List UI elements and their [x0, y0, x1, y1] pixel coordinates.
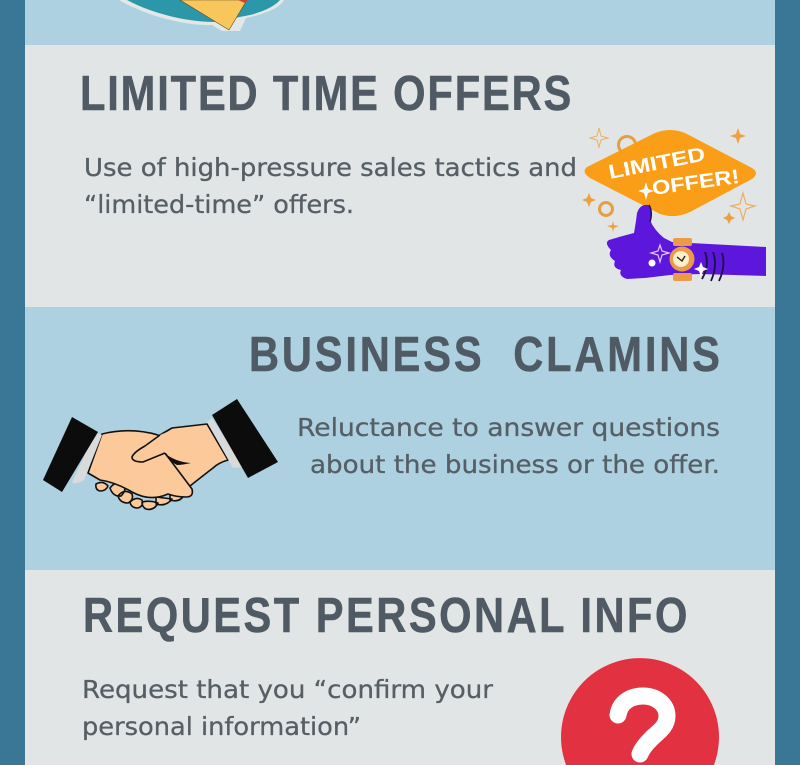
- text block: request description: personal information”: [82, 712, 361, 741]
- heading: limited time offers: LIMITED TIME OFFERS: [80, 66, 571, 121]
- icon: right cuff and sleeve: [207, 399, 278, 478]
- panel: top illustration band: [25, 0, 775, 45]
- icon: red question mark circle: [561, 658, 719, 765]
- icon: wristwatch: [670, 238, 694, 281]
- icon: handshake: [43, 399, 278, 509]
- icon: sparkles: [582, 128, 755, 232]
- text block: business description: about the business or the offer.: [310, 450, 720, 479]
- heading: request personal info: REQUEST PERSONAL INFO: [83, 588, 687, 643]
- text block: limited time description: [84, 153, 577, 219]
- icon: wrist lines and sparkles: [648, 245, 723, 281]
- icon: index finger: [132, 430, 176, 462]
- icon: orange offer tag: [585, 130, 756, 216]
- text block: request description: Request that you “confirm your: [82, 675, 494, 704]
- text block: business description: [297, 413, 720, 479]
- icon: orange offer tag: OFFER!: [651, 166, 741, 200]
- icon: limited offer badge with thumbs up hand: [582, 128, 766, 281]
- heading: business clamins: BUSINESS CLAMINS: [249, 327, 720, 382]
- panel: request personal info: [25, 570, 775, 765]
- icon: left hand: [88, 431, 192, 498]
- text block: limited time description: Use of high-pressure sales tactics and: [84, 153, 577, 182]
- text block: limited time description: “limited-time” offers.: [84, 190, 354, 219]
- icon: left cuff and sleeve: [43, 417, 102, 492]
- icon: fingers: [96, 482, 184, 509]
- icon: right hand: [160, 424, 228, 486]
- icon: cropped teal circle with note: [119, 0, 284, 31]
- icon: purple hand: [607, 205, 766, 279]
- panel: business claims: [25, 307, 775, 570]
- icon: palm crease: [163, 452, 191, 465]
- icon: orange offer tag: LIMITED: [607, 144, 707, 184]
- panel: limited time offers: [25, 45, 775, 307]
- text block: business description: Reluctance to answer questions: [297, 413, 720, 442]
- text block: request description: [82, 675, 494, 741]
